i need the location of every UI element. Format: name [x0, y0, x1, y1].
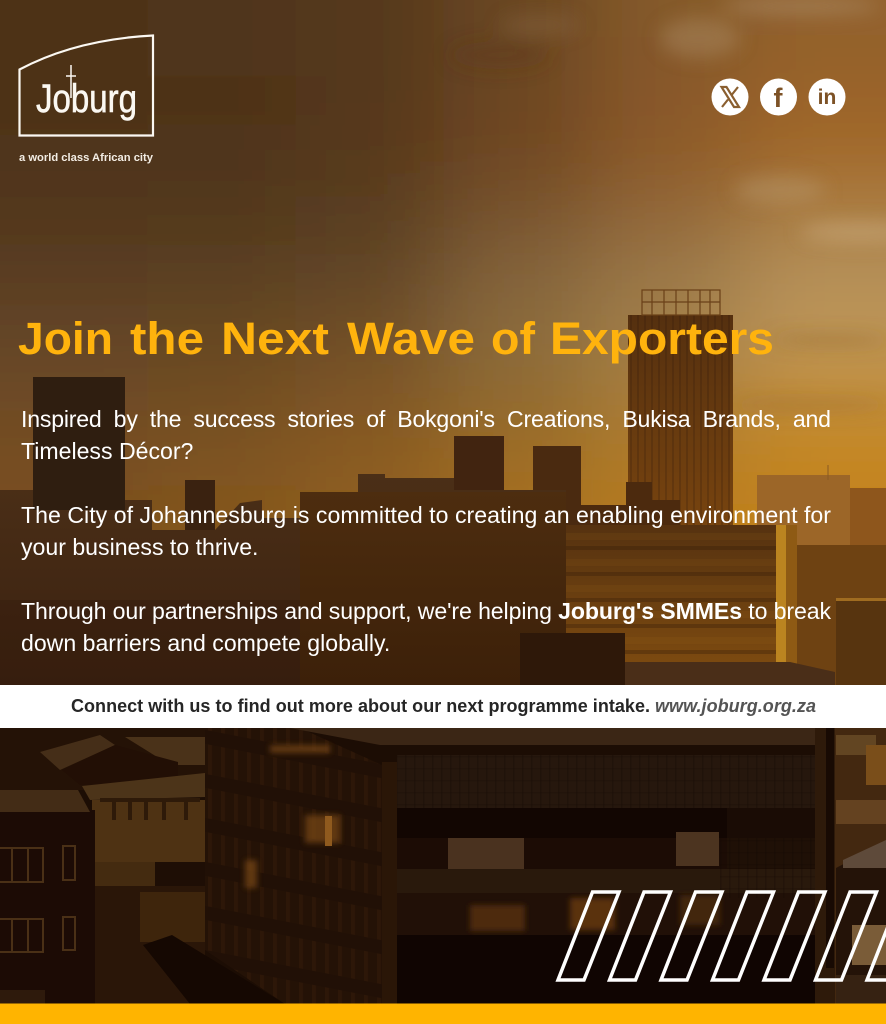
logo tower icon: [66, 65, 76, 98]
text block: commitment: The City of Johannesburg is committed to creating an enabling environment for: [21, 502, 831, 528]
title: the: [130, 313, 204, 364]
decorative parallelograms: [558, 892, 886, 980]
icon: X: [712, 78, 748, 116]
main building side facade: [205, 728, 397, 1004]
text block: partnerships: Through our partnerships and support, we're helping Joburg's SMMEs to break: [21, 598, 831, 624]
call to action band: [0, 685, 886, 728]
photo background: foreground buildings: [0, 728, 886, 1004]
low buildings left: [0, 728, 285, 1004]
title: Wave: [347, 313, 475, 364]
text block: commitment: [21, 502, 831, 560]
social icons: [712, 78, 846, 116]
logo: Joburg: [19, 36, 153, 164]
text block: intro: Timeless Décor?: [21, 438, 193, 464]
call to action band: www.joburg.org.za: [655, 696, 816, 716]
logo tagline: a world class African city: [19, 152, 153, 164]
logo wordmark: Joburg: [36, 77, 137, 121]
text block: intro: [21, 406, 831, 464]
dark building left: [0, 790, 95, 1004]
call to action band: Connect with us to find out more about our next programme intake.: [71, 696, 650, 716]
text block: intro: Inspired by the success stories of Bokgoni's Creations, Bukisa Brands, and: [21, 406, 831, 432]
photo background: city skyline: [0, 290, 886, 685]
text block: partnerships: down barriers and compete globally.: [21, 630, 390, 656]
text block: partnerships: [21, 598, 831, 656]
logo frame: [20, 36, 153, 136]
right distance: [835, 728, 886, 1004]
icon: Facebook: f: [774, 83, 784, 113]
title: [18, 313, 774, 364]
title: Join: [18, 313, 113, 364]
title: Next: [221, 313, 329, 364]
title: Exporters: [550, 313, 774, 364]
icon: LinkedIn: in: [818, 86, 836, 109]
footer bar: [0, 1004, 886, 1024]
main building front: [290, 728, 835, 1004]
title: of: [491, 313, 536, 364]
text block: commitment: your business to thrive.: [21, 534, 258, 560]
